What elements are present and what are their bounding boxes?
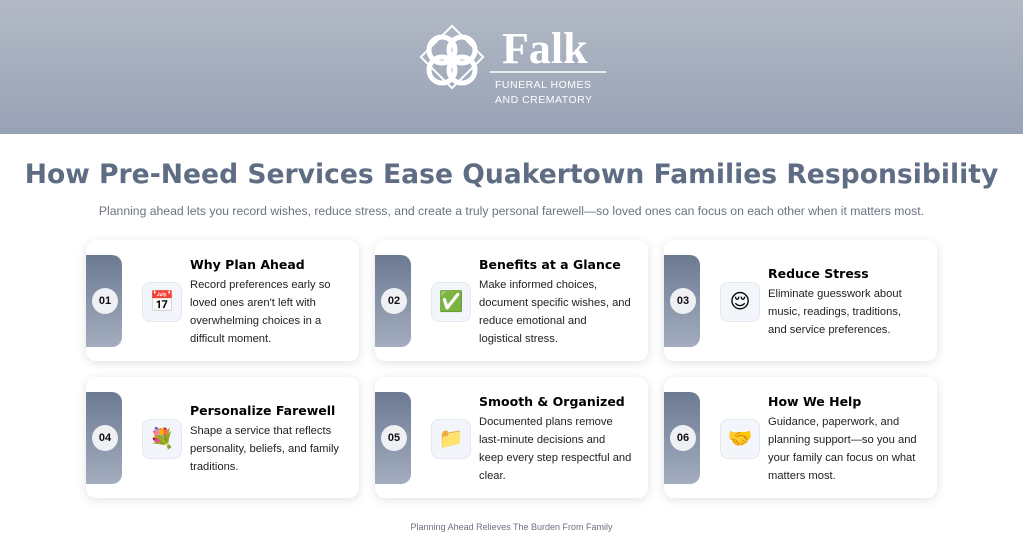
card 01: Why Plan Ahead [190, 257, 305, 272]
logo [420, 24, 606, 106]
card 05: Documented plans remove [479, 416, 613, 428]
card 04: 04 [99, 432, 111, 444]
card 01 [86, 240, 359, 361]
card 05: Smooth & Organized [479, 394, 625, 409]
subtitle: Planning ahead lets you record wishes, reduce stress, and create a truly personal farewell—so loved ones can focus on each other when it matters most. [99, 204, 924, 218]
logo: AND CREMATORY [495, 94, 593, 106]
card 01: 📅 [150, 291, 174, 313]
card 04: Personalize Farewell [190, 403, 335, 418]
card 03: Reduce Stress [768, 266, 869, 281]
card 06: 🤝 [728, 428, 752, 450]
card 03: 😌 [730, 291, 750, 313]
footer: Planning Ahead Relieves The Burden From Family [411, 522, 612, 532]
logo: FUNERAL HOMES [495, 79, 592, 91]
card 02: Benefits at a Glance [479, 257, 621, 272]
title: How Pre-Need Services Ease Quakertown Families Responsibility [25, 159, 998, 190]
card 05: last-minute decisions and [479, 434, 605, 446]
card 03 [664, 240, 937, 361]
card 02: 02 [388, 295, 400, 307]
card 05: 05 [388, 432, 400, 444]
card 01: Record preferences early so loved ones aren't left with overwhelming choices in a difficult moment. [190, 279, 331, 345]
card 06: 06 [677, 432, 689, 444]
card 03: Eliminate guesswork about music, readings, traditions, and service preferences. [768, 288, 902, 336]
card 04: 💐 [150, 428, 174, 450]
card 02: Make informed choices, document specific wishes, and reduce emotional and logistical stress. [479, 279, 631, 345]
card 06: How We Help [768, 394, 861, 409]
logo: Falk [502, 24, 588, 73]
card 06: Guidance, paperwork, and planning support—so you and your family can focus on what matters most. [768, 416, 917, 482]
card 02: ✅ [439, 291, 463, 313]
card 03: 03 [677, 295, 689, 307]
card 05: keep every step respectful and [479, 452, 631, 464]
card 05: clear. [479, 470, 506, 482]
card 05: 📁 [439, 428, 463, 450]
card 01: 01 [99, 295, 111, 307]
card 04 [86, 377, 359, 498]
card 06 [664, 377, 937, 498]
card 04: Shape a service that reflects personality, beliefs, and family traditions. [190, 425, 339, 473]
card 02 [375, 240, 648, 361]
header banner [0, 0, 1023, 134]
card 05 [375, 377, 648, 498]
